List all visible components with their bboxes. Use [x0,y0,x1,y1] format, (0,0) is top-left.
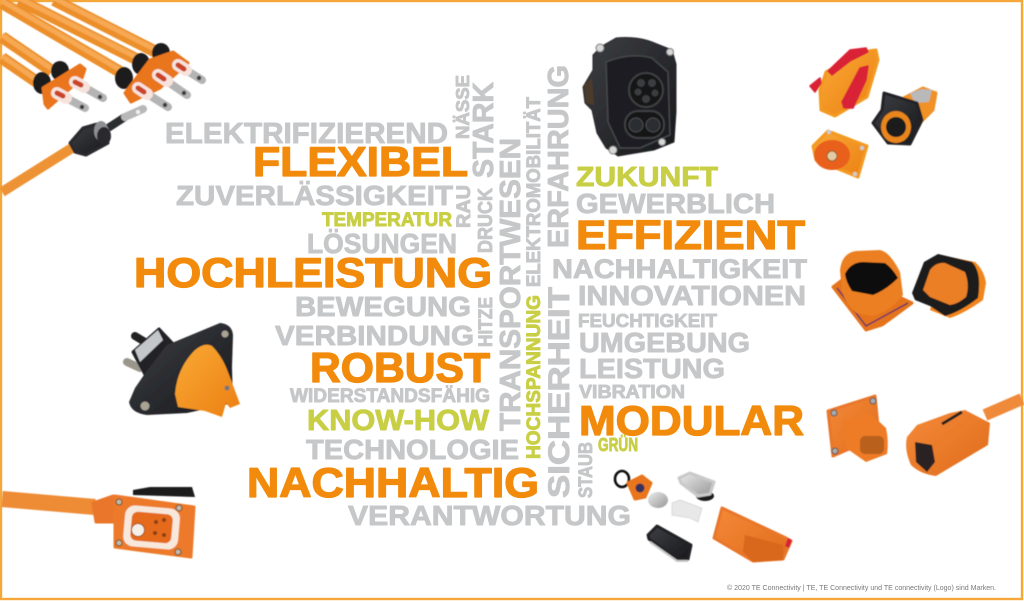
word cloud [134,65,808,531]
word: ELEKTRIFIZIEREND: ELEKTRIFIZIEREND [165,118,448,150]
orange cap [714,508,792,562]
cable [985,399,1022,415]
word: DRUCK (vertical): DRUCK [475,188,497,253]
lug holes [80,76,201,109]
black shell [648,526,691,561]
word: LEISTUNG: LEISTUNG [579,353,725,384]
word: HITZE (vertical): HITZE [476,297,497,347]
word: TRANSPORTWESEN (vertical): TRANSPORTWESEN [495,138,527,431]
rear housing [133,329,176,380]
word: WIDERSTANDSFÄHIG: WIDERSTANDSFÄHIG [290,386,490,407]
socket [828,396,888,462]
word: NACHHALTIGKEIT: NACHHALTIGKEIT [552,254,808,284]
product: black charging inlet, top centre [583,38,676,156]
black body [129,323,233,415]
product: black switch with orange knob, left [127,323,240,417]
terminal lugs [57,65,202,108]
word: ELEKTROMOBILITÄT (vertical): ELEKTROMOBILITÄT [524,97,545,287]
screws [596,44,674,154]
word: VERANTWORTUNG: VERANTWORTUNG [348,500,631,531]
boot [93,496,115,522]
product: cable connector with white seal, bottom left [2,487,195,557]
product: exploded connector parts, bottom centre [615,471,792,562]
upper socket [629,73,663,107]
white part [672,500,702,522]
copyright notice: © 2020 TE Connectivity | TE, TE Connectivity und TE connectivity (Logo) sind Marken. [727,583,996,592]
word: ROBUST: ROBUST [310,344,490,391]
word: LÖSUNGEN: LÖSUNGEN [307,228,457,259]
word: SICHERHEIT (vertical): SICHERHEIT [543,287,576,498]
word: EFFIZIENT: EFFIZIENT [576,212,805,258]
white seal [122,505,181,550]
word: VERBINDUNG: VERBINDUNG [275,320,474,351]
word: ZUVERLÄSSIGKEIT: ZUVERLÄSSIGKEIT [176,180,453,211]
word: STARK (vertical): STARK [468,82,500,178]
cable [2,499,95,507]
red and orange connector [810,48,878,116]
label [135,330,163,362]
word: FEUCHTIGKEIT: FEUCHTIGKEIT [578,311,717,331]
word: GEWERBLICH: GEWERBLICH [576,188,775,219]
word: INNOVATIONEN: INNOVATIONEN [578,280,806,311]
screws [116,499,182,555]
studs [135,336,150,345]
product: square housing and plug, right [833,250,986,330]
word: HOCHSPANNUNG (vertical): HOCHSPANNUNG [524,295,545,459]
product: three orange connectors, top right [810,48,936,177]
word: ZUKUNFT: ZUKUNFT [576,161,718,192]
housing with flange [833,250,912,330]
word: HOCHLEISTUNG: HOCHLEISTUNG [134,249,492,296]
black latch [133,487,195,497]
silver cover [679,473,714,501]
plug [906,410,990,476]
screws [222,330,228,338]
word: ERFAHRUNG (vertical): ERFAHRUNG [543,65,575,248]
word: GRÜN: GRÜN [598,435,638,455]
word: KNOW-HOW: KNOW-HOW [307,405,490,437]
contact area [130,511,173,544]
small orange square [628,476,651,499]
word: TECHNOLOGIE: TECHNOLOGIE [306,434,519,465]
word: NACHHALTIG: NACHHALTIG [247,459,539,506]
plug with black clip [912,254,986,318]
word: MODULAR: MODULAR [579,397,804,444]
product: orange socket and plug with cable, lower right [828,396,1022,476]
black and orange connector [873,88,936,144]
sealing ring [615,471,629,487]
word: FLEXIBEL: FLEXIBEL [253,138,468,185]
word: UMGEBUNG: UMGEBUNG [579,327,750,358]
body [115,496,194,557]
word: RAU (vertical): RAU [454,185,475,228]
word: TEMPERATUR: TEMPERATUR [322,210,452,231]
lower socket [625,111,664,138]
silver cylinder [648,492,668,508]
cables [2,0,160,192]
black connector with lug [70,109,143,155]
orange socket [813,130,867,177]
product: orange cables with flanges and black connector, top left [2,0,202,192]
word: STAUB (vertical): STAUB [576,442,597,498]
grommets [33,43,170,94]
word: VIBRATION: VIBRATION [579,382,685,402]
word: NÄSSE (vertical): NÄSSE [453,75,473,139]
flanges [43,65,85,108]
orange knob [175,345,240,417]
word: BEWEGUNG: BEWEGUNG [295,291,471,322]
